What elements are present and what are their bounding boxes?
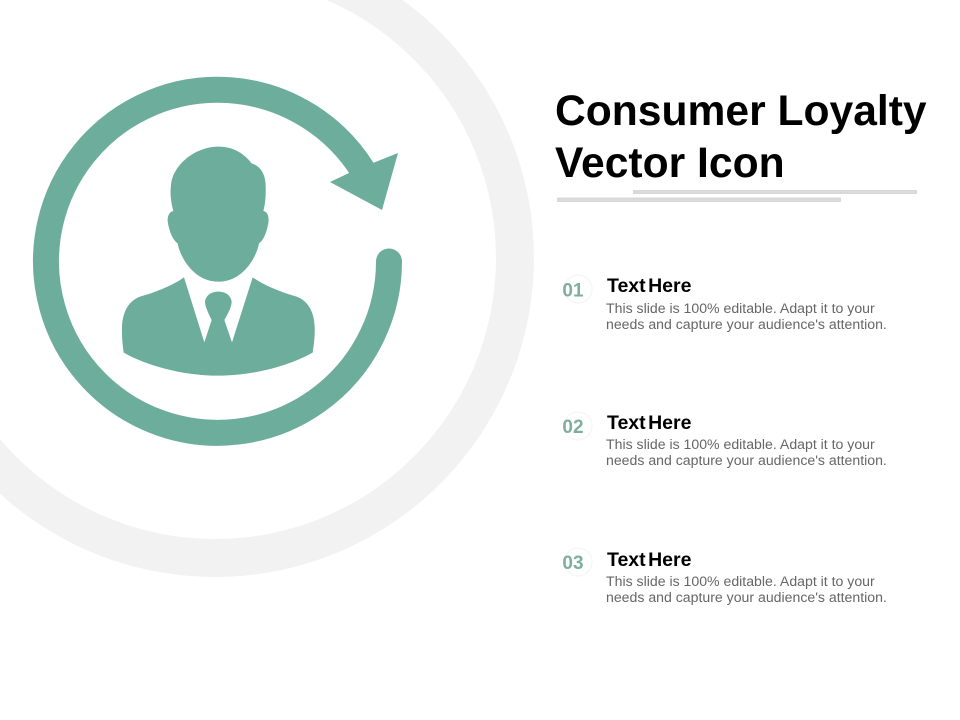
head — [168, 147, 269, 282]
suit and tie — [122, 277, 315, 376]
heading 01: Text Here — [607, 275, 692, 297]
description 01: needs and capture your audience's attention. — [606, 316, 887, 332]
arrow shaft rounded end — [376, 248, 402, 274]
heading 03: Text Here — [607, 549, 692, 571]
item 02 — [562, 412, 887, 468]
number badge 01: 01 — [562, 280, 584, 302]
number badge 03 — [562, 548, 592, 576]
number badge 02 — [562, 412, 592, 440]
heading 02: Text Here — [607, 412, 692, 434]
description 02: needs and capture your audience's attention. — [606, 452, 887, 468]
circular arrow shaft — [46, 90, 389, 433]
background gray ring — [0, 0, 515, 558]
arrow head — [330, 153, 398, 210]
item 03 — [562, 548, 887, 605]
icon: customer loyalty — [46, 90, 402, 433]
number badge 02: 02 — [562, 417, 584, 438]
item 01 — [562, 275, 887, 332]
description 01: This slide is 100% editable. Adapt it to your — [606, 300, 875, 316]
description 02: This slide is 100% editable. Adapt it to your — [606, 436, 875, 452]
title: Vector Icon — [555, 139, 785, 187]
description 03: needs and capture your audience's attention. — [606, 589, 887, 605]
number badge 01 — [562, 275, 592, 303]
number badge 03: 03 — [562, 553, 584, 574]
title underline bars — [557, 190, 917, 202]
title: Consumer Loyalty — [555, 87, 927, 135]
description 03: This slide is 100% editable. Adapt it to your — [606, 573, 875, 589]
icon: businessman silhouette — [122, 147, 315, 376]
